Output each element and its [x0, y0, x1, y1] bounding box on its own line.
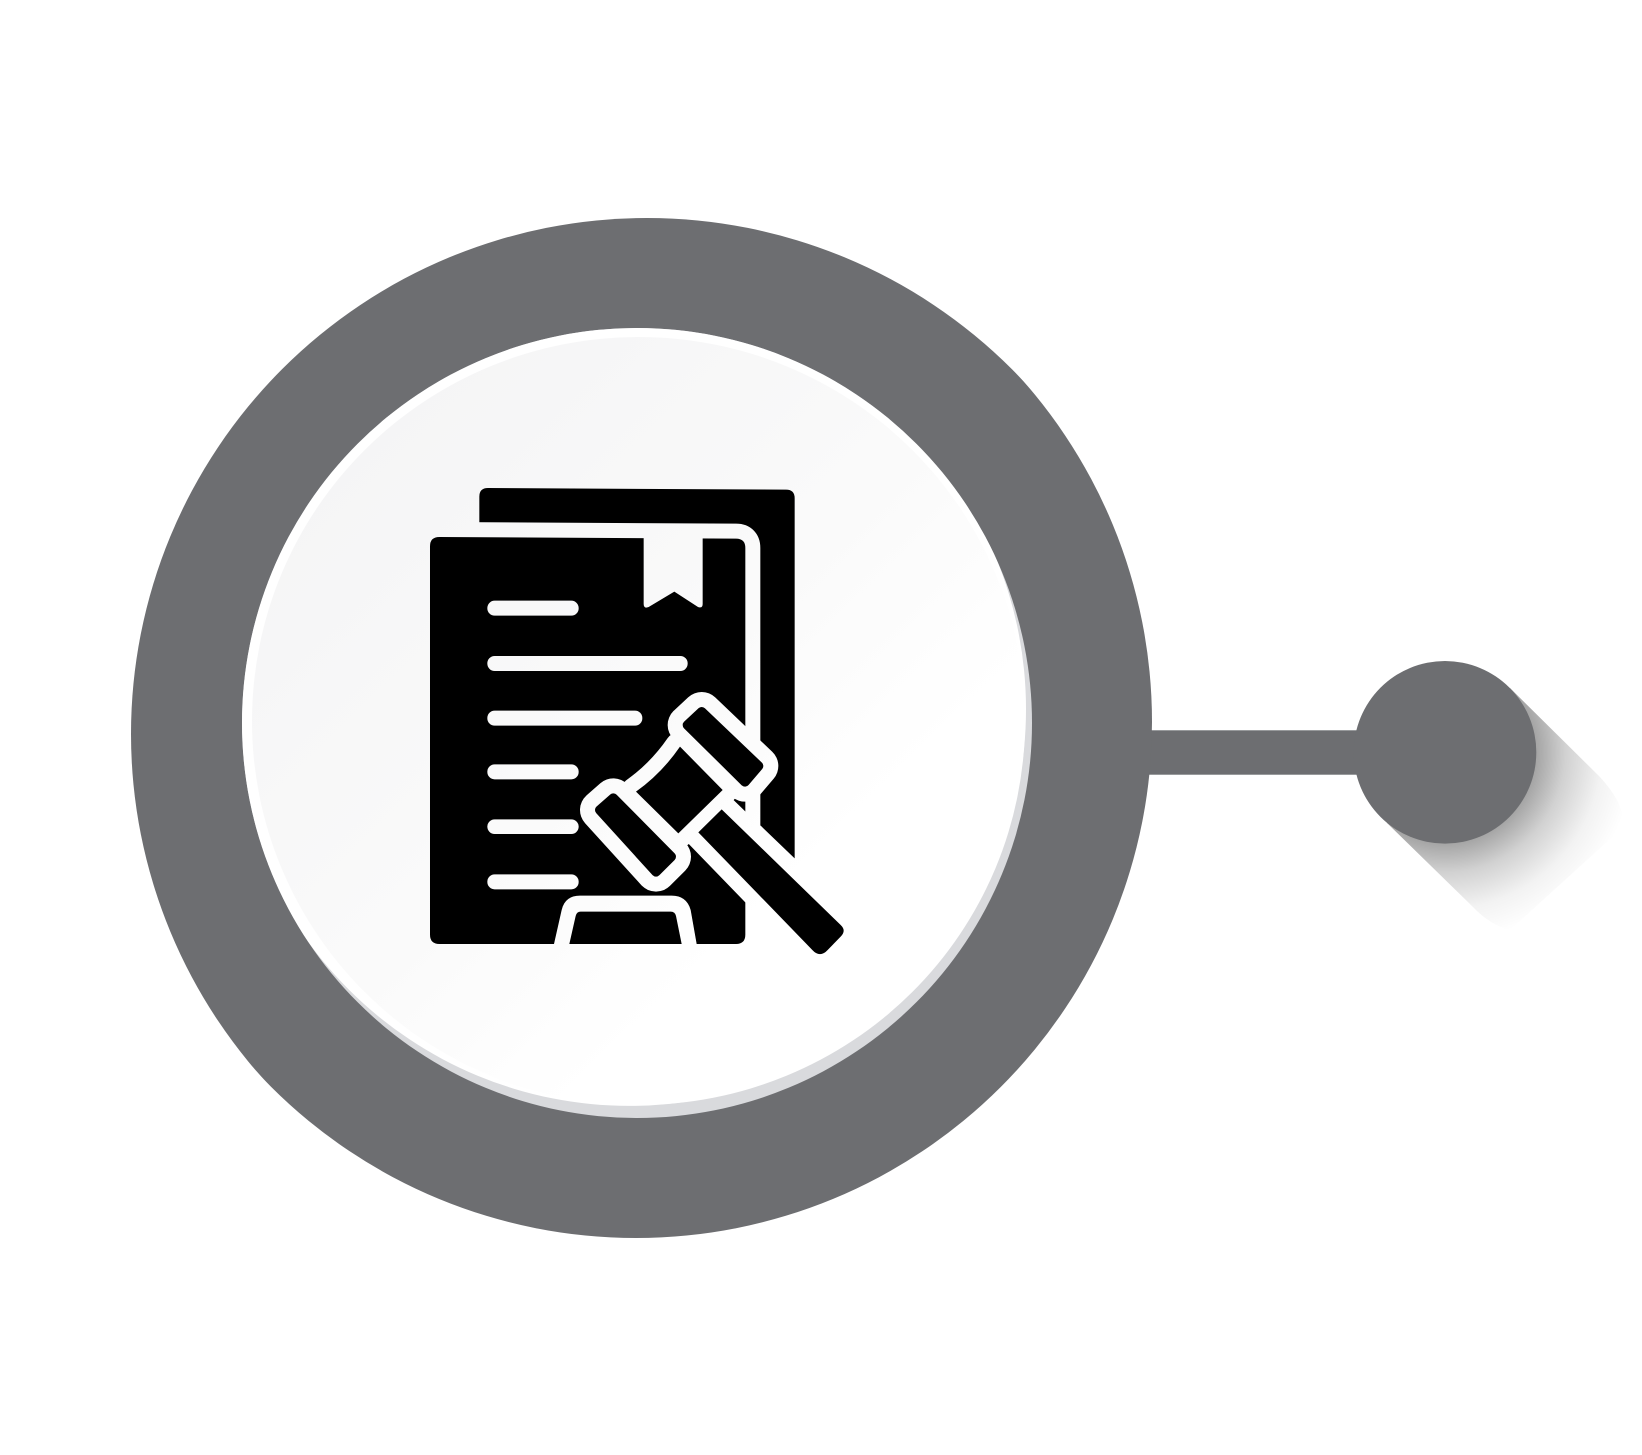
gavel head lower	[600, 798, 671, 872]
front page halo	[430, 537, 745, 944]
disc bevel crescent	[242, 328, 1032, 1118]
sound block outline	[554, 896, 697, 944]
gavel outline	[600, 712, 844, 954]
gavel neck	[636, 747, 723, 833]
sound block	[569, 912, 682, 944]
text lines	[487, 601, 688, 889]
gavel	[600, 712, 844, 954]
bookmark ribbon	[644, 538, 703, 608]
connector node circle	[1354, 661, 1536, 844]
icon: legal document with gavel	[430, 488, 844, 954]
back page	[479, 488, 795, 858]
gavel handle	[698, 809, 844, 954]
disc white rim	[233, 313, 1026, 1106]
disc face	[252, 337, 1025, 1105]
front page	[430, 537, 745, 944]
connector bar	[1140, 730, 1370, 775]
infographic canvas	[131, 218, 1608, 1238]
gavel head upper	[687, 712, 759, 782]
long shadow of connector node	[1387, 688, 1622, 930]
inner disc	[233, 313, 1032, 1118]
outer grey ring	[131, 218, 1163, 1250]
gavel sound block	[554, 896, 697, 944]
